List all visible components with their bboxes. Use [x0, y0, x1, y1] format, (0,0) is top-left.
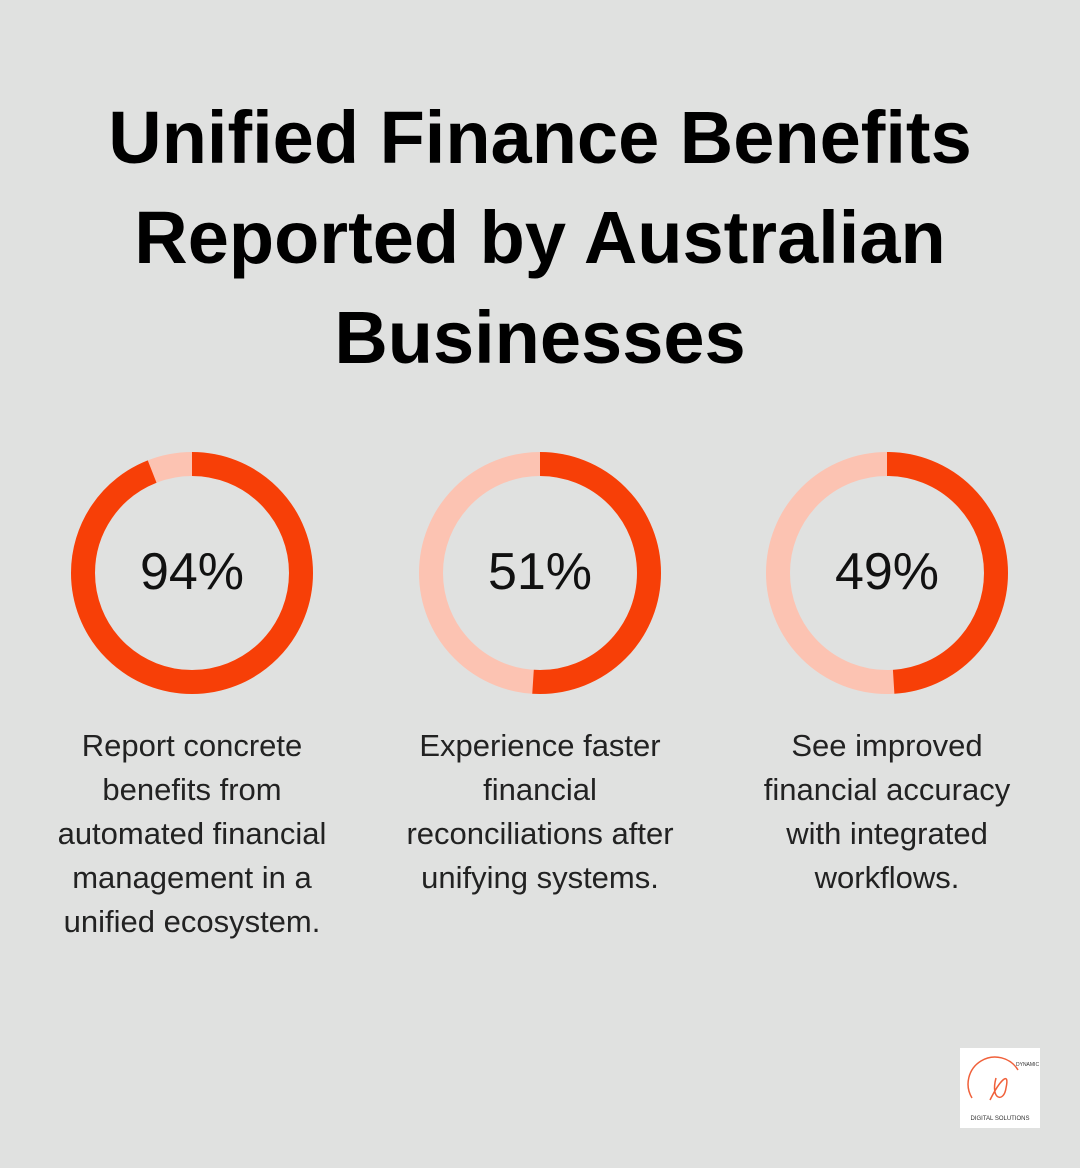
description 49: with integrated [786, 816, 988, 851]
description 51 [406, 728, 674, 895]
description 94: management in a [72, 860, 312, 895]
panel: 49% [764, 452, 1010, 895]
description 51: unifying systems. [421, 860, 659, 895]
description 49: workflows. [815, 860, 959, 895]
description 51: Experience faster [419, 728, 661, 763]
description 94: unified ecosystem. [64, 904, 320, 939]
description 94: Report concrete [82, 728, 302, 763]
logo: DYNAMIC [1016, 1062, 1039, 1068]
description 51: financial [483, 772, 597, 807]
donut chart 94 [71, 452, 313, 694]
panel: 51% [406, 452, 674, 895]
description 51: reconciliations after [406, 816, 674, 851]
number 51: 51% [488, 543, 592, 601]
title: Businesses [334, 296, 746, 379]
description 49: See improved [791, 728, 983, 763]
description 94 [58, 728, 326, 939]
title [108, 96, 972, 379]
title: Unified Finance Benefits [108, 96, 972, 179]
description 49: financial accuracy [764, 772, 1010, 807]
logo: DIGITAL SOLUTIONS [970, 1116, 1030, 1122]
description 49 [764, 728, 1010, 895]
number 49: 49% [835, 543, 939, 601]
panel: 94% [58, 452, 326, 939]
description 94: automated financial [58, 816, 326, 851]
description 94: benefits from [102, 772, 282, 807]
number 94: 94% [140, 543, 244, 601]
donut chart 51 [419, 452, 661, 694]
title: Reported by Australian [134, 196, 946, 279]
logo [960, 1048, 1040, 1128]
donut chart 49 [766, 452, 1008, 694]
